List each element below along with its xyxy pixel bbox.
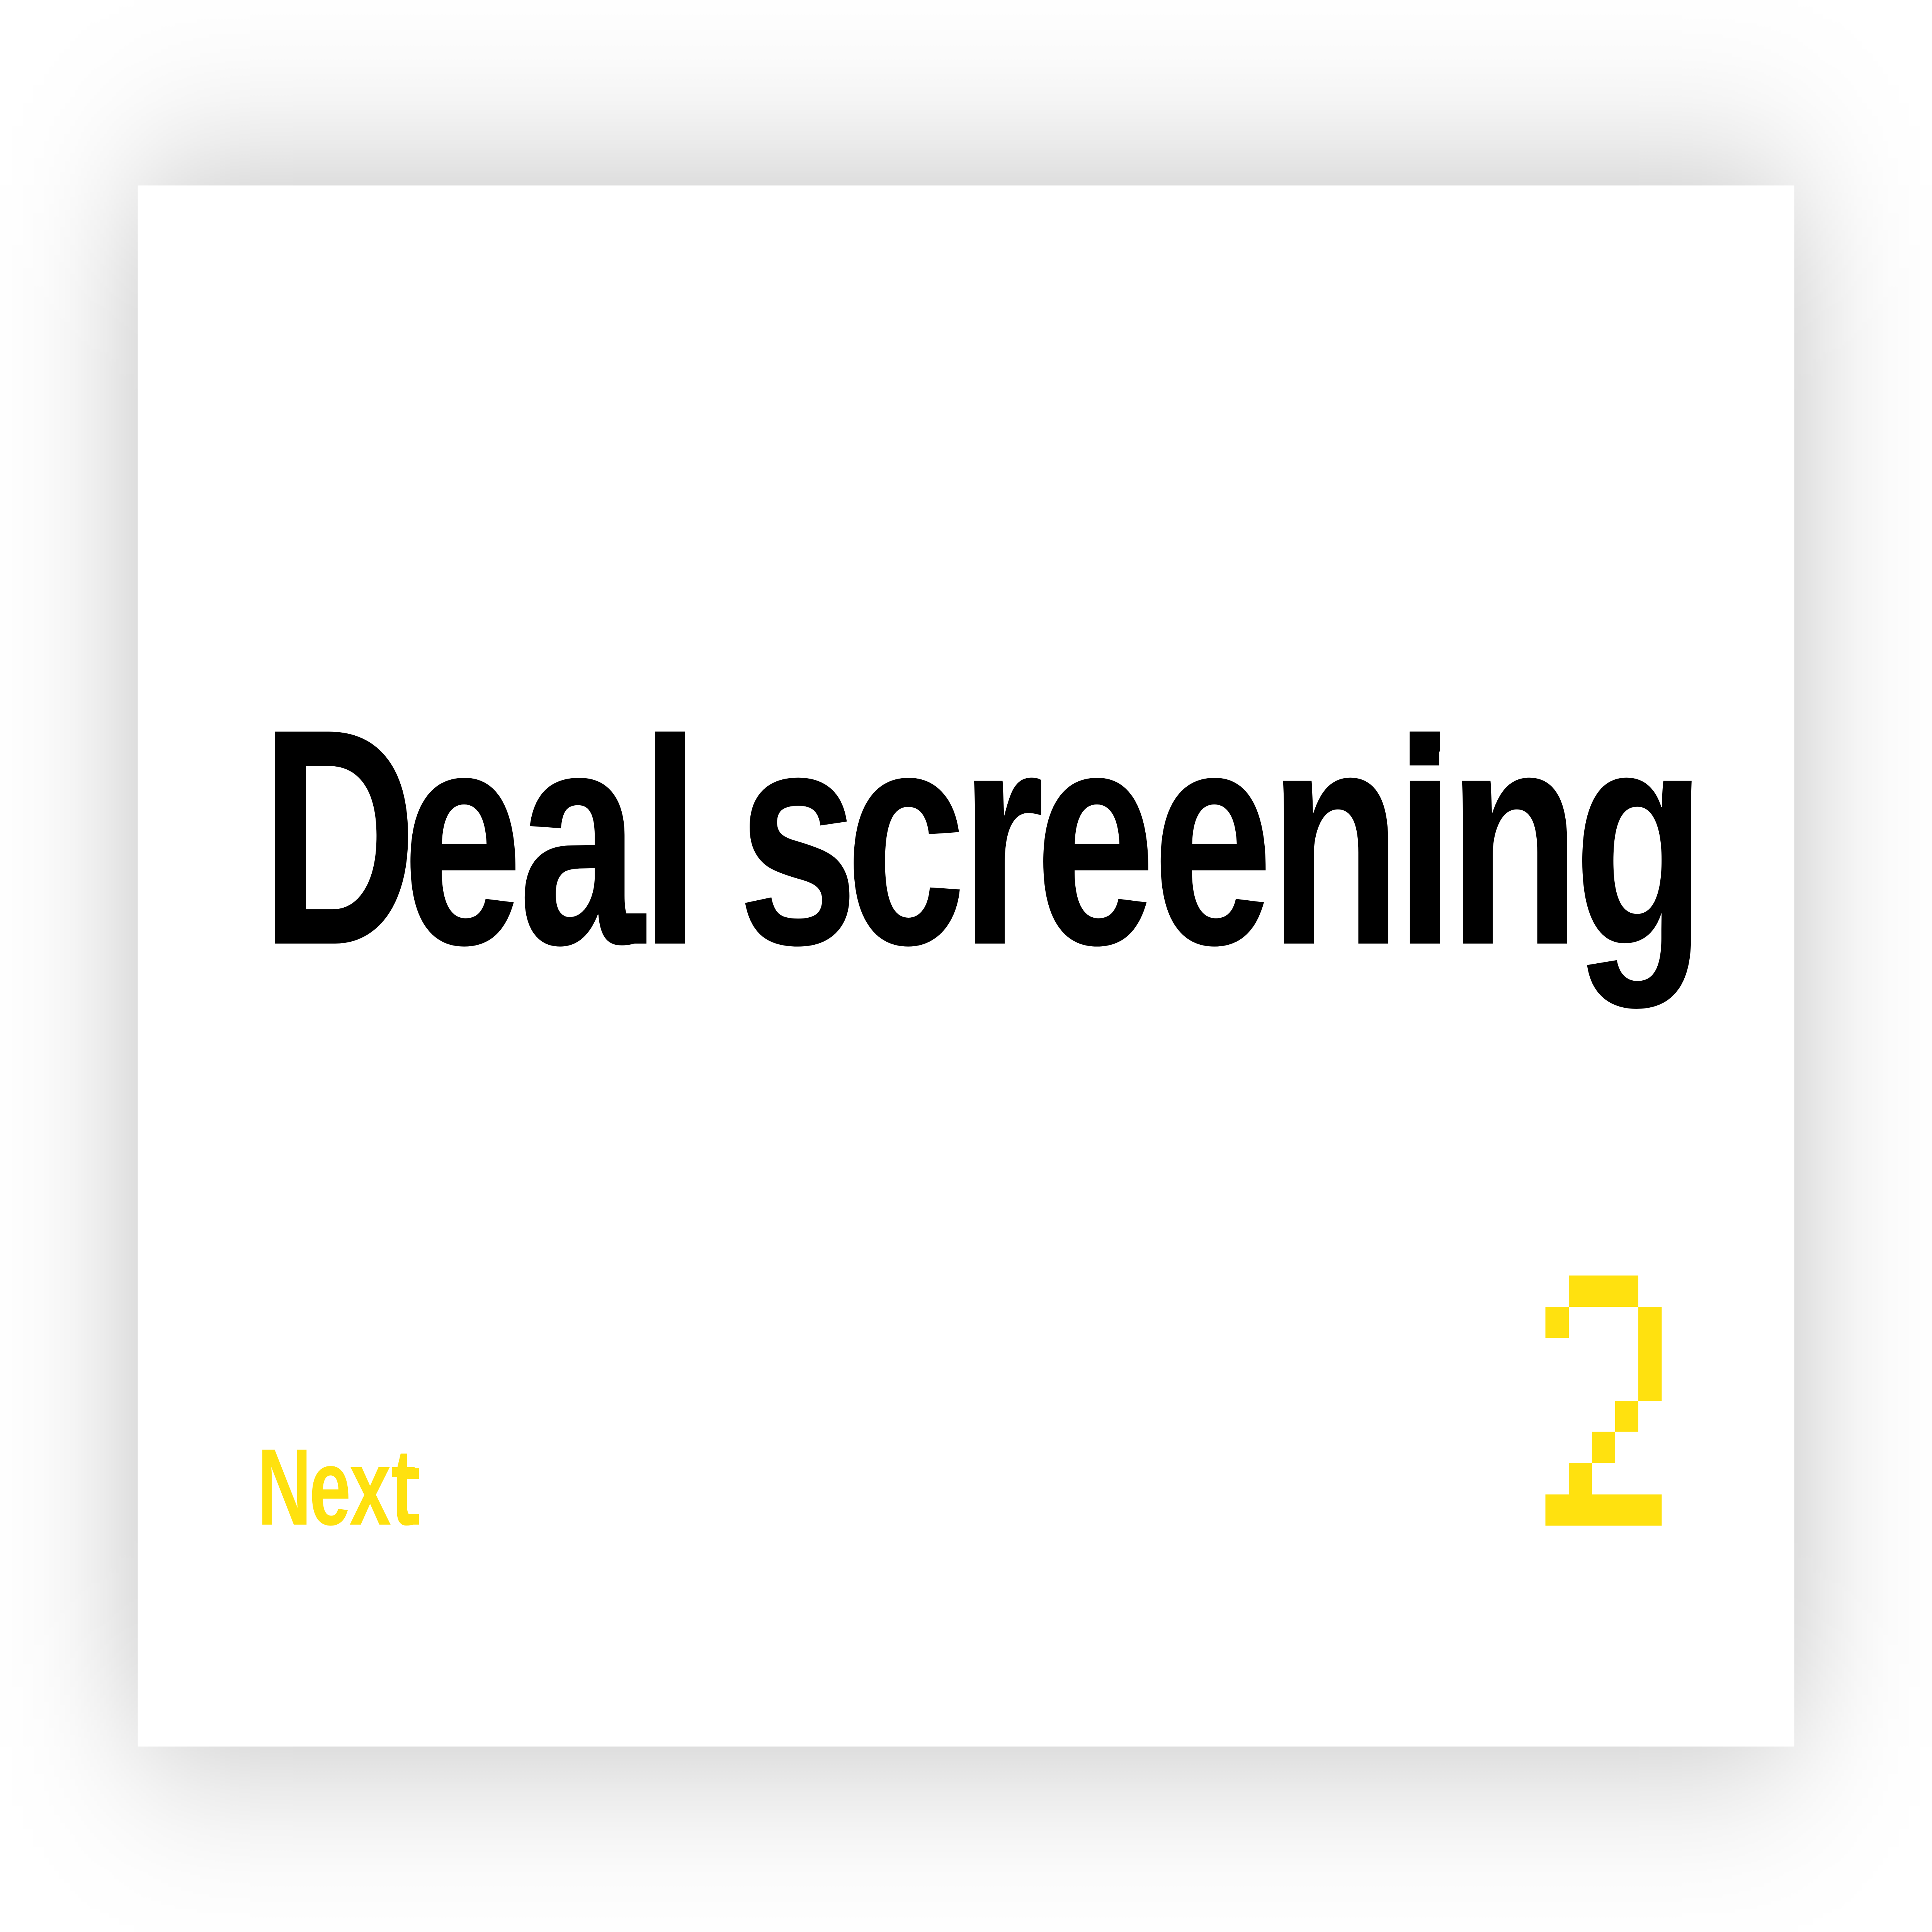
next label: Next <box>257 1427 416 1548</box>
panel: white card <box>138 185 1794 1747</box>
title: Deal screening <box>260 665 1706 1011</box>
icon: pixel numeral 2 <box>1546 1276 1662 1526</box>
